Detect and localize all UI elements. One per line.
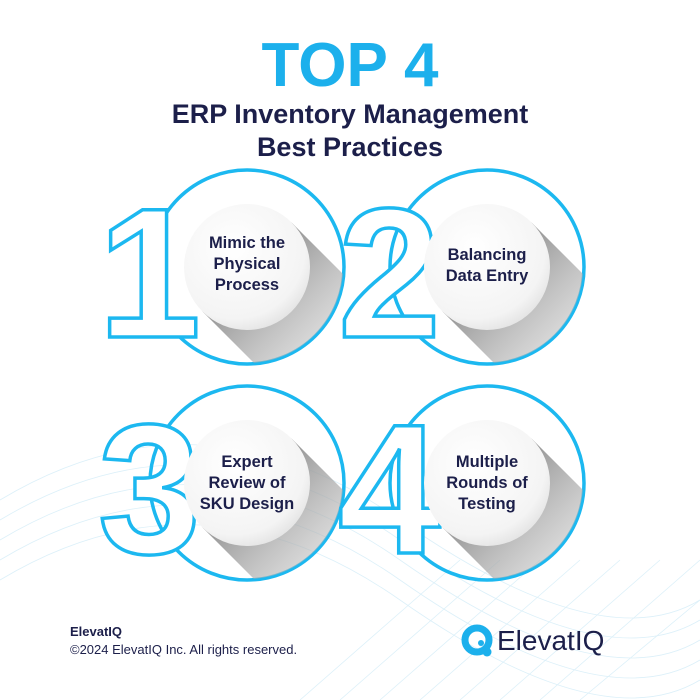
item 2 <box>342 168 586 366</box>
item 4: Rounds of <box>446 474 528 492</box>
item 3: SKU Design <box>200 495 294 513</box>
item 2: Balancing <box>448 246 526 264</box>
item 1: Mimic the <box>209 234 285 252</box>
item 4: Multiple <box>456 453 518 471</box>
title: TOP 4 <box>262 31 439 100</box>
item 2: Data Entry <box>446 267 529 285</box>
footer text: ElevatIQ <box>70 624 122 639</box>
item 3: Expert <box>221 453 273 471</box>
logo: ElevatIQ <box>497 625 604 656</box>
footer text: ©2024 ElevatIQ Inc. All rights reserved. <box>70 642 297 657</box>
item 4: Testing <box>458 495 516 513</box>
icon: number 1: 1 <box>98 171 201 377</box>
item 1 <box>108 168 346 366</box>
item 3: Review of <box>208 474 286 492</box>
icon: number 3: 3 <box>98 387 201 593</box>
icon: number 4: 4 <box>338 387 441 593</box>
icon: number 2: 2 <box>338 171 441 377</box>
item 3 <box>100 384 346 582</box>
item 1: Process <box>215 276 279 294</box>
background wave lines <box>0 445 700 700</box>
item 4 <box>339 384 586 582</box>
subtitle: Best Practices <box>257 132 443 162</box>
subtitle: ERP Inventory Management <box>172 99 528 129</box>
item 1: Physical <box>214 255 280 273</box>
